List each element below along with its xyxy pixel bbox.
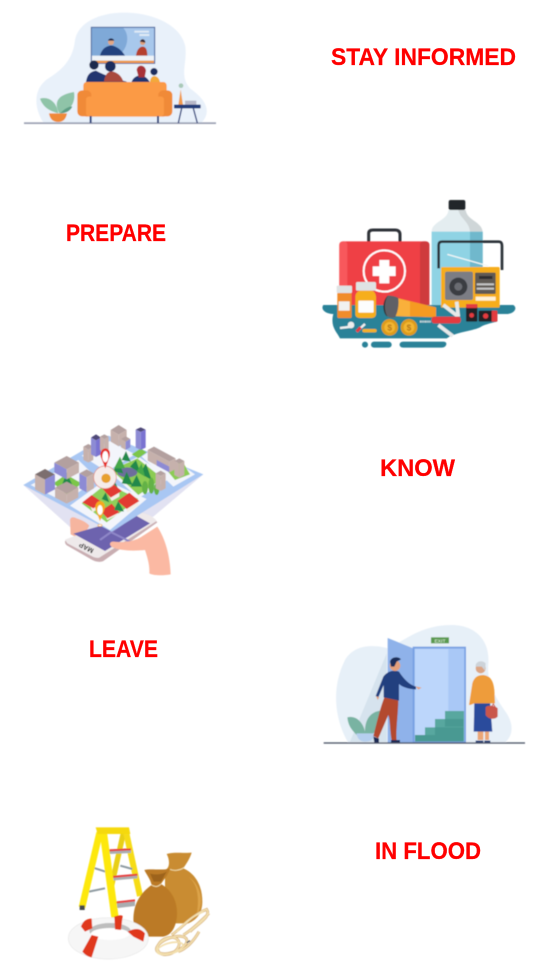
heading: know: KNOW — [380, 455, 455, 482]
heading: prepare: PREPARE — [66, 220, 166, 247]
illustration: man opening exit door for elderly woman — [324, 625, 525, 744]
illustration: emergency kit — [322, 200, 515, 348]
illustration: hand holding phone with city map — [23, 425, 203, 575]
illustration: family watching news on TV — [24, 13, 216, 124]
illustration: hand holding phone with city map: MAP — [78, 540, 95, 554]
illustration: emergency kit: $ — [407, 322, 412, 332]
illustration: emergency kit: $ — [387, 322, 392, 332]
heading: stay informed: STAY INFORMED — [331, 44, 516, 71]
illustration: man opening exit door for elderly woman: EXIT — [434, 638, 446, 644]
heading: leave: LEAVE — [89, 636, 158, 663]
heading: in flood: IN FLOOD — [375, 838, 481, 865]
illustration: ladder, sandbags, life ring and rope — [68, 827, 209, 959]
